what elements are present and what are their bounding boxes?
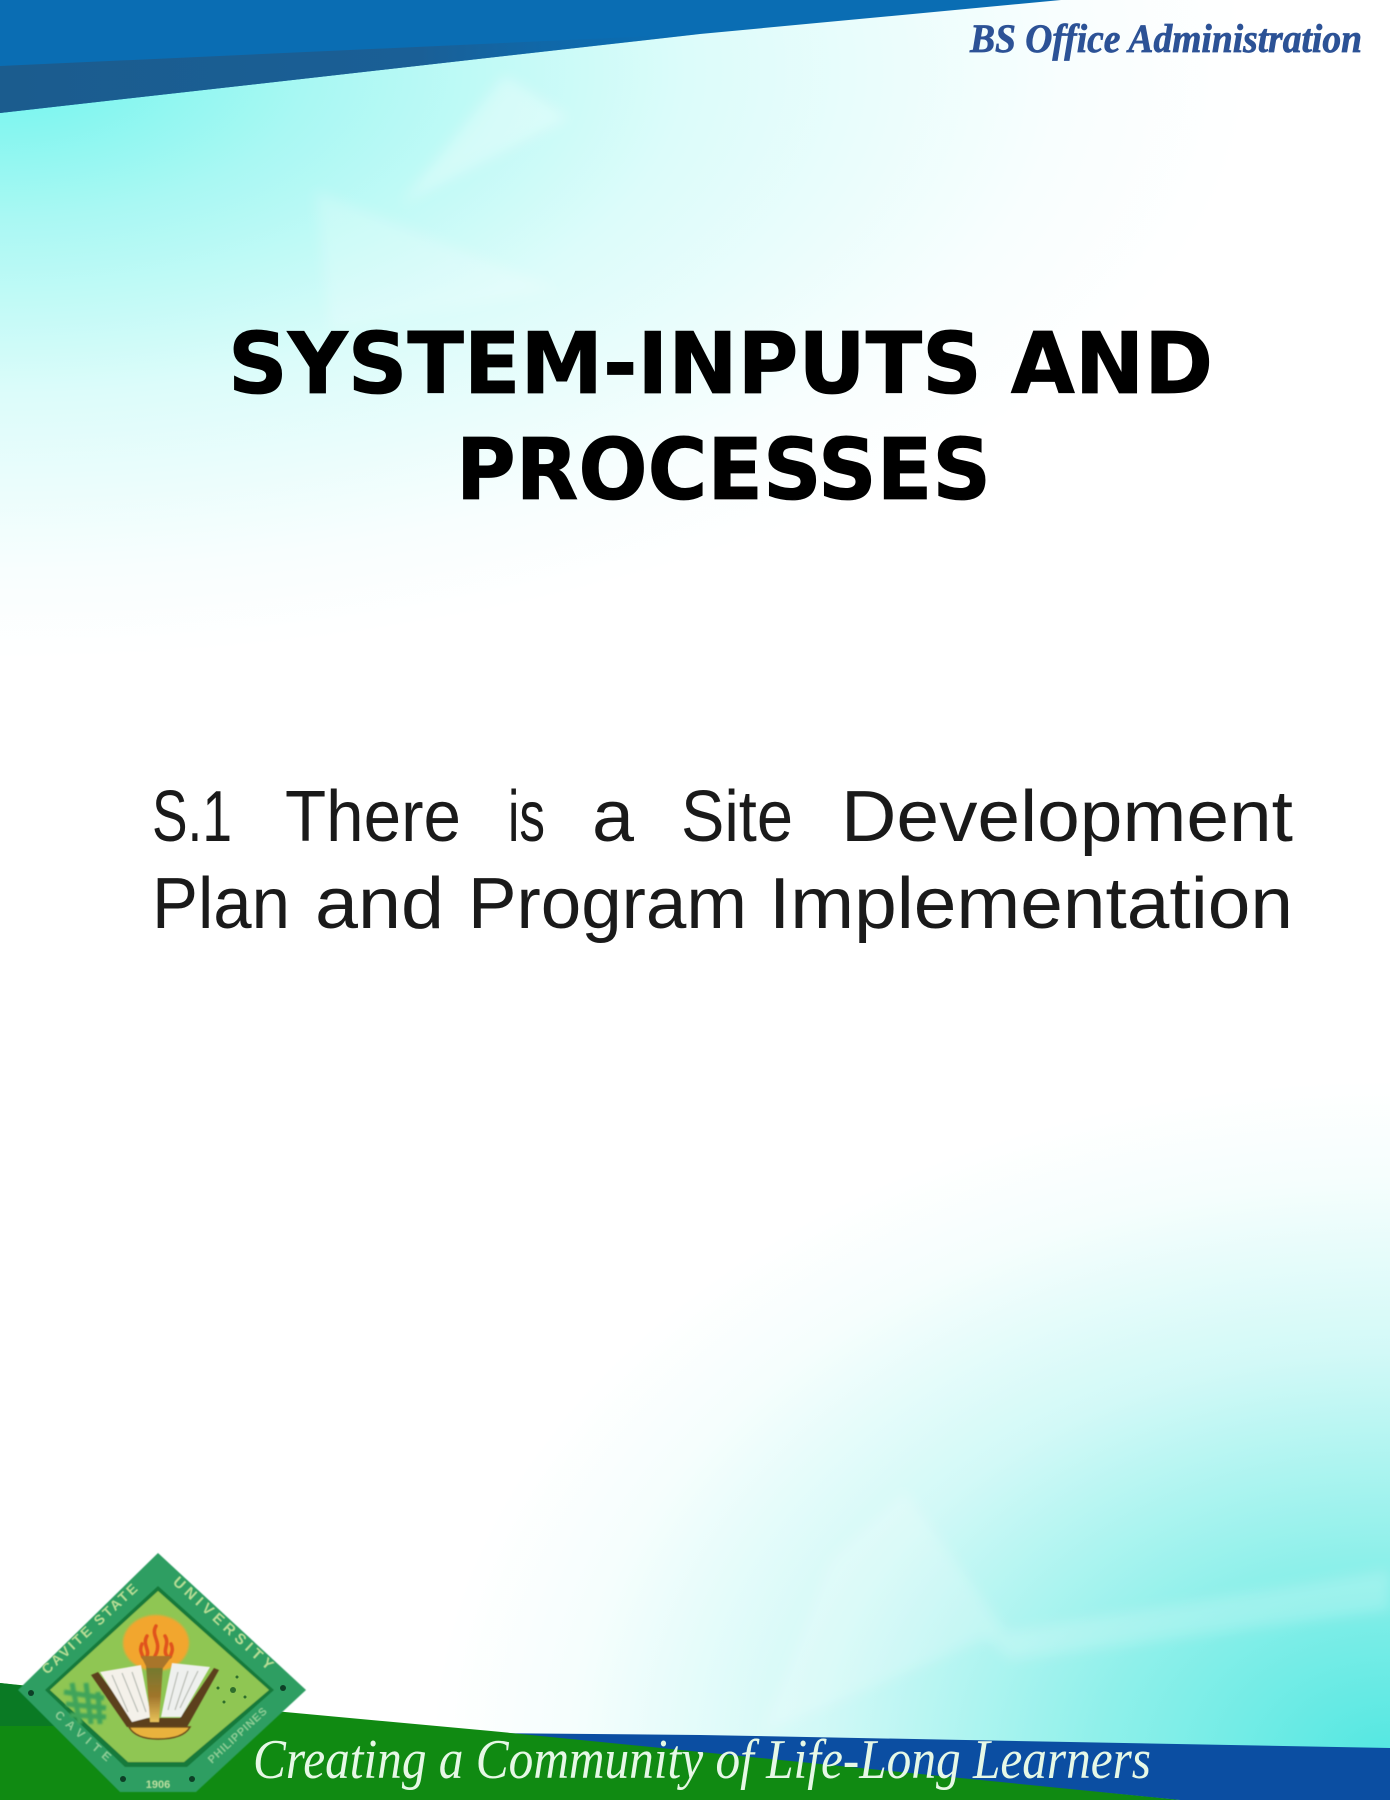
text block: S.1 statement: S.1 xyxy=(152,777,232,857)
text block: S.1 statement: Development xyxy=(841,777,1293,857)
title xyxy=(228,315,1213,520)
slogan: Creating a Community of Life-Long Learners xyxy=(253,1729,1151,1791)
logo ring dots xyxy=(28,1685,286,1782)
text block: S.1 statement: Plan xyxy=(152,864,290,944)
logo ring lettering xyxy=(38,1573,277,1791)
logo flame xyxy=(141,1626,172,1657)
header label: programme name: BS Office Administration xyxy=(969,16,1362,61)
title: SYSTEM-INPUTS AND xyxy=(228,315,1213,414)
logo ring lettering: PHILIPPINES xyxy=(206,1706,270,1766)
text block: S.1 statement: and xyxy=(315,864,444,944)
logo sun xyxy=(123,1615,189,1671)
text block: S.1 statement: Program xyxy=(468,864,747,944)
title: PROCESSES xyxy=(456,421,991,520)
text block: S.1 statement: a xyxy=(592,777,635,857)
text block: S.1 statement: Implementation xyxy=(769,864,1293,944)
text block: S.1 statement: Site xyxy=(681,777,793,857)
logo ring lettering: 1906 xyxy=(146,1779,170,1791)
footer band: blue and green swoosh xyxy=(0,1683,1390,1800)
text block: S.1 statement xyxy=(152,777,1293,944)
logo ring lettering: CAVITE STATE xyxy=(38,1580,140,1677)
text block: S.1 statement: There xyxy=(285,777,461,857)
logo ring lettering: CAVITE xyxy=(52,1708,114,1764)
logo: Cavite State University seal xyxy=(18,1553,306,1792)
header band: blue swoosh xyxy=(0,0,1061,113)
logo book and torch xyxy=(91,1656,219,1739)
logo ring lettering: UNIVERSITY xyxy=(169,1573,277,1674)
text block: S.1 statement: is xyxy=(508,777,545,857)
logo wheat xyxy=(64,1683,106,1724)
logo atom xyxy=(216,1676,246,1704)
